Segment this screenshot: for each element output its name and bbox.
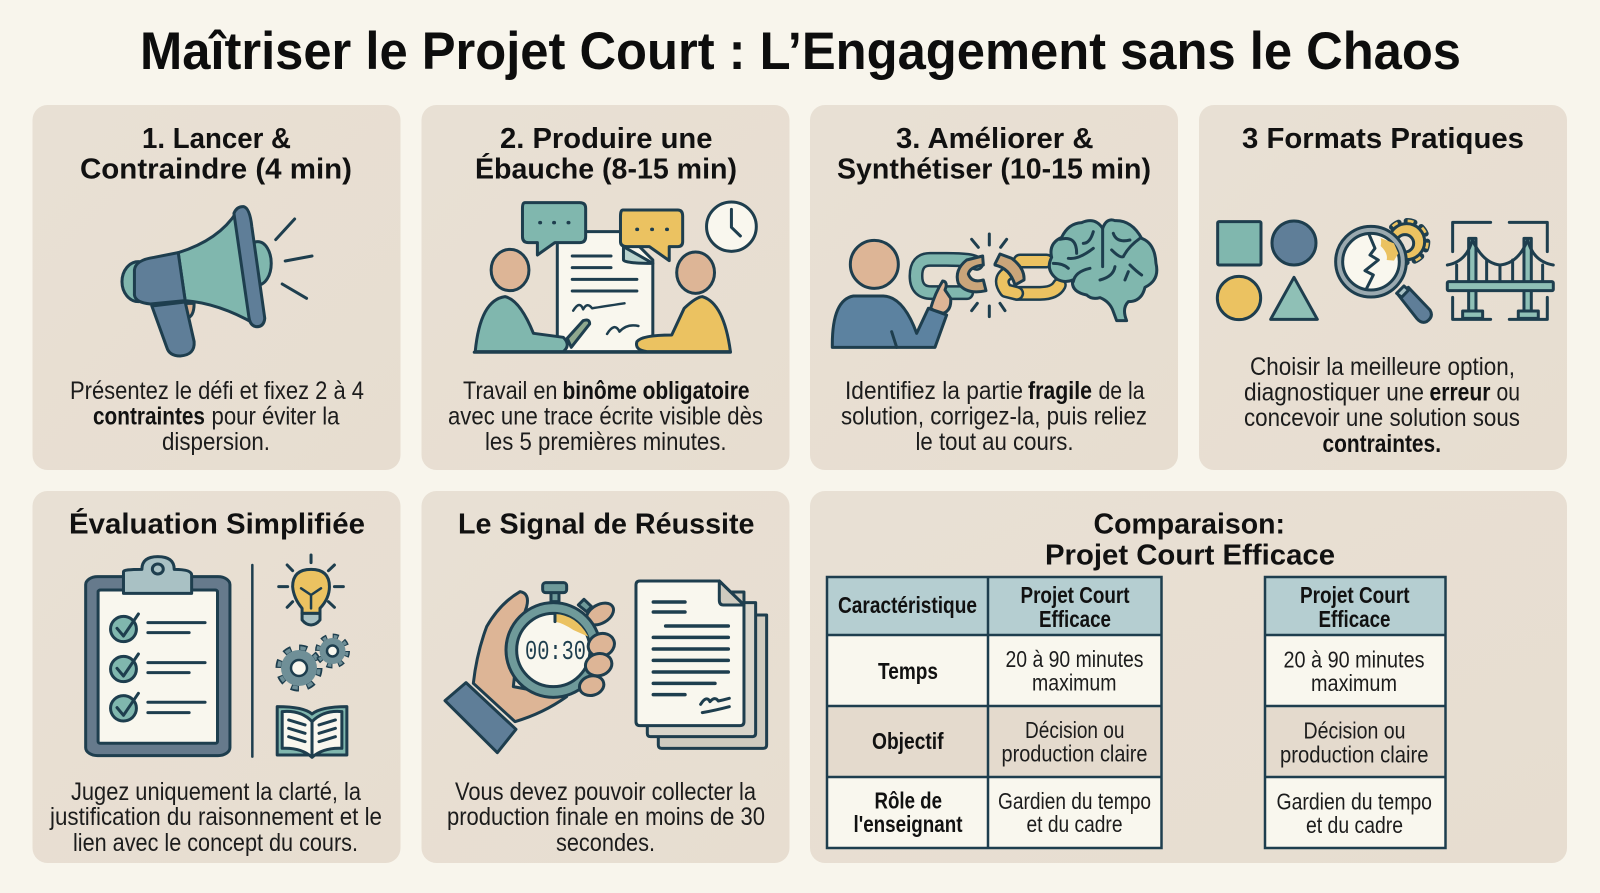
body: lancer: Présentez le défi et fixez 2 à 4 bbox=[70, 377, 364, 405]
panel: comparaison bbox=[810, 491, 1567, 863]
panel: 1. Lancer et contraindre bbox=[32, 105, 400, 470]
body: produire: Travail en bbox=[463, 377, 558, 405]
body: signal bbox=[447, 778, 765, 857]
body: signal: production finale en moins de 30 bbox=[447, 803, 765, 831]
heading: formats: 3 Formats Pratiques bbox=[1242, 123, 1524, 155]
table: left comparison: Efficace bbox=[1039, 606, 1111, 632]
body: ameliorer: Identifiez la partie bbox=[845, 377, 1023, 405]
table: left comparison bbox=[827, 577, 1162, 848]
table: left comparison: Caractéristique bbox=[838, 592, 977, 618]
table: right comparison: et du cadre bbox=[1306, 812, 1403, 838]
panel: 3 formats pratiques bbox=[1199, 105, 1567, 470]
heading: lancer: 1. Lancer & bbox=[142, 123, 291, 155]
panel: 2. Produire une ebauche bbox=[422, 105, 790, 470]
panel: 3. Ameliorer et synthetiser bbox=[810, 105, 1178, 470]
table: right comparison: maximum bbox=[1311, 670, 1397, 696]
body: evaluation: justification du raisonnement et le bbox=[49, 803, 382, 831]
heading: ameliorer bbox=[837, 123, 1151, 186]
heading: signal: Le Signal de Réussite bbox=[458, 508, 754, 540]
title: Maîtriser le Projet Court : L’Engagement sans le Chaos bbox=[140, 22, 1461, 81]
body: ameliorer: de la bbox=[1098, 377, 1145, 405]
icon: gears bbox=[279, 636, 347, 688]
table: left comparison: maximum bbox=[1032, 670, 1116, 696]
body: formats: erreur bbox=[1430, 378, 1491, 406]
table: right comparison: Projet Court bbox=[1300, 582, 1410, 608]
heading: lancer: Contraindre (4 min) bbox=[80, 154, 352, 186]
body: lancer: contraintes bbox=[93, 402, 205, 430]
heading: comparaison: Comparaison: bbox=[1094, 508, 1285, 540]
table: left comparison: l'enseignant bbox=[854, 811, 963, 837]
table: left comparison: Décision ou bbox=[1025, 717, 1124, 743]
heading: ameliorer: 3. Améliorer & bbox=[896, 123, 1094, 155]
heading: produire: Ébauche (8-15 min) bbox=[475, 152, 737, 186]
body: evaluation: lien avec le concept du cours. bbox=[73, 829, 358, 857]
table: right comparison: Efficace bbox=[1318, 606, 1390, 632]
body: lancer: pour éviter la bbox=[212, 402, 340, 430]
icon: person, broken chain and brain bbox=[832, 220, 1157, 347]
table: left comparison: Gardien du tempo bbox=[998, 788, 1151, 814]
table: left comparison: Temps bbox=[878, 658, 938, 684]
body: ameliorer bbox=[841, 377, 1147, 456]
panel: evaluation simplifiee bbox=[32, 491, 400, 863]
body: ameliorer: solution, corrigez-la, puis reliez bbox=[841, 402, 1147, 430]
body: produire bbox=[448, 377, 763, 456]
body: formats: diagnostiquer une bbox=[1244, 378, 1424, 406]
icon: clipboard checklist bbox=[86, 555, 347, 757]
heading: comparaison bbox=[1045, 508, 1335, 572]
body: ameliorer: fragile bbox=[1028, 377, 1092, 405]
icon: hand holding stopwatch bbox=[445, 581, 767, 753]
body: formats: contraintes. bbox=[1322, 430, 1441, 458]
table: left comparison: Objectif bbox=[872, 728, 944, 754]
body: evaluation bbox=[49, 778, 382, 857]
table: right comparison: production claire bbox=[1280, 742, 1428, 768]
table: left comparison: 20 à 90 minutes bbox=[1006, 646, 1144, 672]
table: left comparison: et du cadre bbox=[1026, 811, 1122, 837]
body: produire: avec une trace écrite visible dès bbox=[448, 402, 763, 430]
body: ameliorer: le tout au cours. bbox=[916, 428, 1074, 456]
body: evaluation: Jugez uniquement la clarté, la bbox=[71, 778, 361, 806]
body: signal: Vous devez pouvoir collecter la bbox=[455, 778, 756, 806]
heading: comparaison: Projet Court Efficace bbox=[1045, 540, 1335, 572]
body: formats bbox=[1244, 353, 1520, 458]
table: left comparison: production claire bbox=[1002, 740, 1148, 766]
body: signal: secondes. bbox=[556, 829, 655, 857]
table: right comparison: Décision ou bbox=[1304, 718, 1406, 744]
table: left comparison: Projet Court bbox=[1020, 582, 1130, 608]
heading: ameliorer: Synthétiser (10-15 min) bbox=[837, 154, 1151, 186]
table: right comparison bbox=[1265, 577, 1446, 848]
body: formats: Choisir la meilleure option, bbox=[1250, 353, 1515, 381]
heading: produire: 2. Produire une bbox=[500, 123, 712, 155]
body: formats: concevoir une solution sous bbox=[1244, 404, 1520, 432]
icon: megaphone bbox=[122, 207, 312, 356]
body: produire: binôme obligatoire bbox=[562, 377, 750, 405]
table: right comparison: Gardien du tempo bbox=[1276, 788, 1432, 814]
stopwatch time: 00:30 bbox=[525, 638, 586, 668]
icon: shapes, magnifier and bridge bbox=[1217, 221, 1553, 322]
heading: produire bbox=[475, 123, 737, 186]
body: lancer bbox=[70, 377, 364, 456]
heading: lancer bbox=[80, 123, 352, 186]
icon: binome and document bbox=[474, 202, 756, 352]
body: formats: ou bbox=[1496, 378, 1520, 406]
heading: evaluation: Évaluation Simplifiée bbox=[69, 506, 365, 540]
body: produire: les 5 premières minutes. bbox=[485, 428, 726, 456]
panel: le signal de reussite bbox=[422, 491, 790, 863]
table: left comparison: Rôle de bbox=[874, 788, 942, 814]
body: lancer: dispersion. bbox=[162, 428, 270, 456]
table: right comparison: 20 à 90 minutes bbox=[1284, 646, 1424, 672]
